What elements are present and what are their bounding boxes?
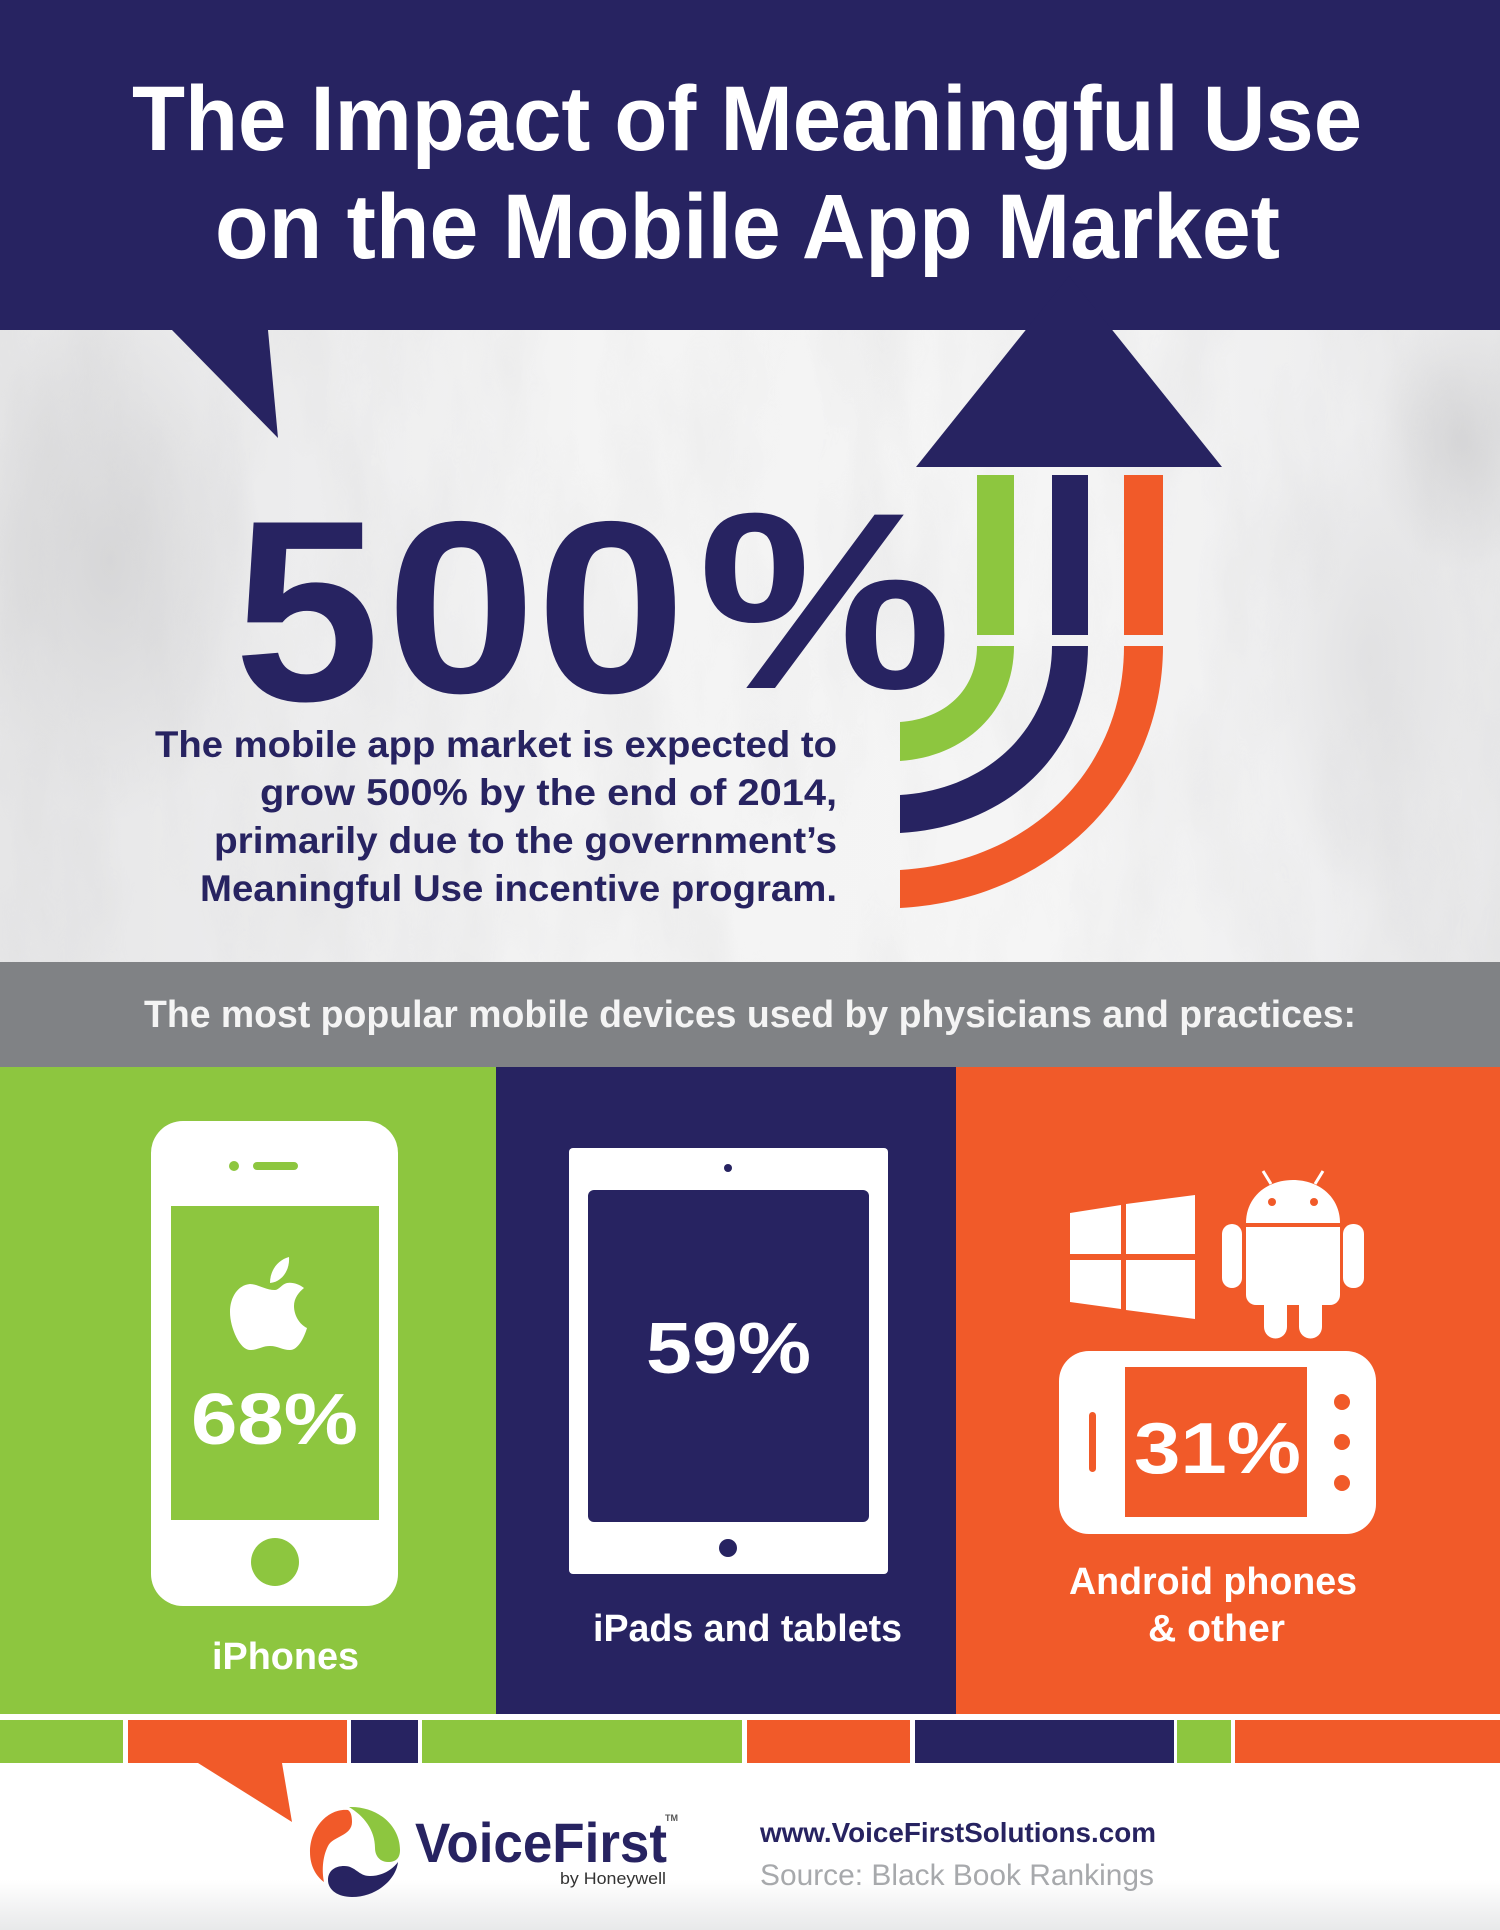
footer background <box>0 1880 1500 1930</box>
500% figure: % <box>698 461 952 742</box>
icon: android <box>1222 1171 1364 1338</box>
color strip <box>0 1720 1500 1822</box>
icon: landscape phone <box>1059 1351 1376 1534</box>
panel: iPads and tablets <box>496 1067 956 1714</box>
website and source: www.VoiceFirstSolutions.com <box>759 1817 1156 1848</box>
gray band heading: The most popular mobile devices used by physicians and practices: <box>144 994 1356 1036</box>
description text <box>155 724 837 909</box>
gray band heading <box>0 962 1500 1067</box>
icon: iPhone <box>151 1121 398 1606</box>
500% figure: 00 <box>386 470 686 744</box>
label: Android phones & other <box>1069 1561 1357 1650</box>
description text: Meaningful Use incentive program. <box>200 868 837 909</box>
header banner <box>0 0 1500 438</box>
textured background panel <box>0 300 1500 962</box>
website and source: Source: Black Book Rankings <box>760 1859 1154 1892</box>
website and source <box>759 1817 1156 1892</box>
label: iPads and tablets: iPads and tablets <box>593 1608 902 1650</box>
icon: windows <box>1070 1195 1195 1319</box>
500% figure <box>234 461 952 755</box>
label: Android phones & other: Android phones <box>1069 1561 1357 1603</box>
500% figure: 5 <box>234 466 380 755</box>
stat: 68%: 68% <box>191 1380 358 1460</box>
description text: The mobile app market is expected to <box>155 724 837 765</box>
description text: primarily due to the government’s <box>214 820 837 861</box>
label: Android phones & other: & other <box>1148 1608 1285 1650</box>
growth arrow <box>900 276 1222 908</box>
logo mark <box>310 1807 400 1897</box>
title: The Impact of Meaningful Use <box>132 68 1362 170</box>
title <box>132 68 1362 278</box>
speech bubble tail: orange <box>198 1763 292 1822</box>
panel: Android phones and other <box>956 1067 1500 1714</box>
stat: 31%: 31% <box>1134 1409 1301 1489</box>
panel: iPhones <box>0 1067 496 1714</box>
description text: grow 500% by the end of 2014, <box>260 772 837 813</box>
speech bubble tail <box>172 330 278 438</box>
label: iPhones: iPhones <box>212 1636 359 1678</box>
icon: tablet <box>569 1148 888 1574</box>
trademark: TM <box>665 1813 678 1823</box>
title: on the Mobile App Market <box>215 176 1280 278</box>
stat: 59%: 59% <box>646 1309 811 1389</box>
icon: apple <box>230 1257 307 1350</box>
logo wordmark: VoiceFirst <box>415 1811 667 1874</box>
logo: VoiceFirst <box>310 1807 678 1897</box>
by Honeywell: by Honeywell <box>560 1869 666 1888</box>
